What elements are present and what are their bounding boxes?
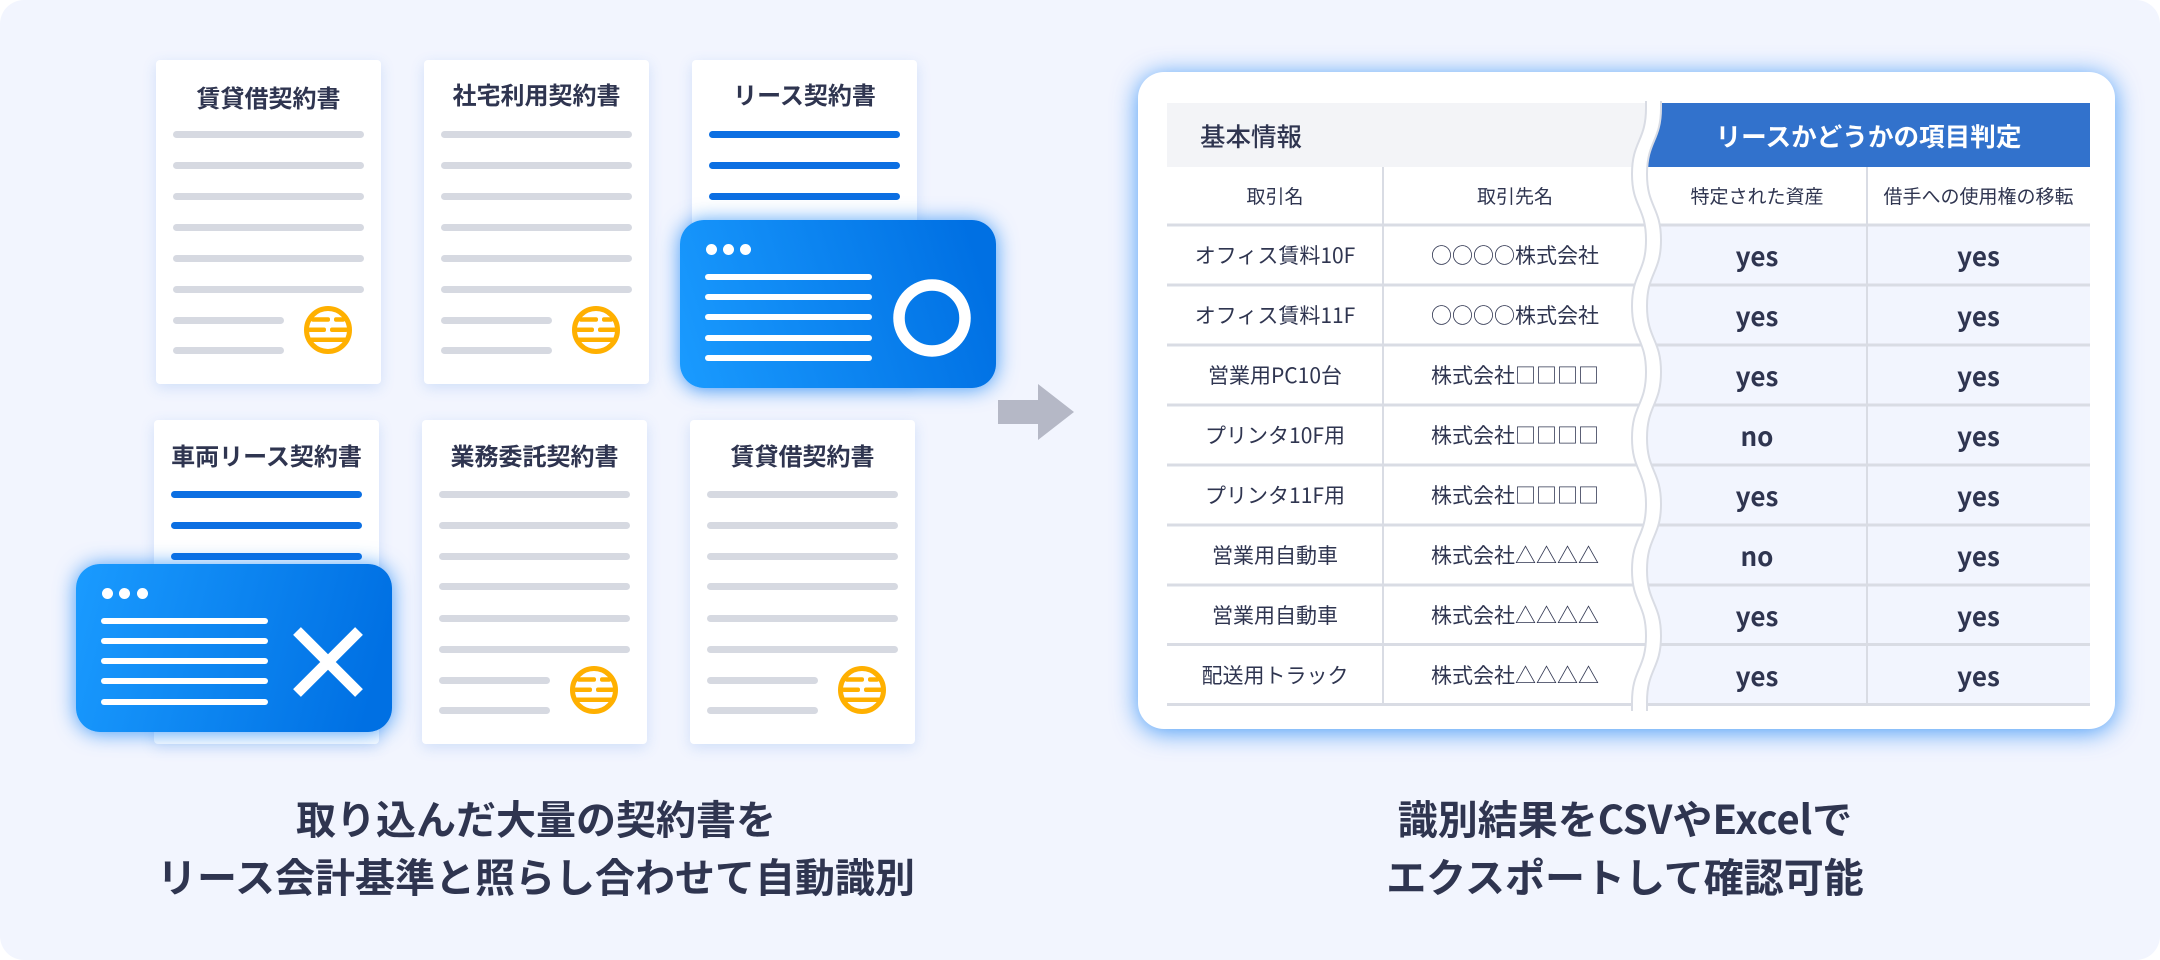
table row 6 [1212, 537, 2000, 574]
column header: 特定された資産: 特定された資産 [1690, 182, 1824, 209]
table row 5: 株式会社□□□□ [1431, 480, 1599, 510]
caption: left: リース会計基準と照らし合わせて自動識別 [157, 846, 915, 904]
document: 業務委託契約書 [422, 420, 647, 744]
table row 1 [1195, 237, 2000, 274]
document title: 車両リース契約書 [171, 437, 362, 472]
document: 賃貸借契約書 (bottom right) [690, 420, 915, 744]
document title: 賃貸借契約書 [730, 437, 874, 472]
table row 4: 株式会社□□□□ [1431, 420, 1599, 450]
table row 7: yes [1957, 597, 2000, 634]
caption: right: エクスポートして確認可能 [1386, 846, 1864, 904]
panel: result table card [1138, 72, 2115, 729]
document: 社宅利用契約書 [424, 60, 649, 384]
table row 3: 営業用PC10台 [1208, 360, 1342, 390]
table row 6: no [1741, 537, 1773, 574]
icon: cross mark [293, 627, 363, 697]
table row 8: yes [1736, 657, 1778, 694]
table row 6: 株式会社△△△△ [1431, 540, 1599, 570]
table row 7: 営業用自動車 [1212, 600, 1338, 630]
table row 3 [1208, 357, 2000, 394]
document: 車両リース契約書 [154, 420, 379, 744]
table row 8: 配送用トラック [1202, 660, 1348, 690]
column header: 取引先名: 取引先名 [1477, 182, 1553, 209]
table row 7: 株式会社△△△△ [1431, 600, 1599, 630]
table row 7 [1212, 597, 2000, 634]
table row 5 [1205, 477, 2000, 514]
table row 4: プリンタ10F用 [1205, 420, 1345, 450]
table row 2: ○○○○株式会社 [1431, 300, 1599, 330]
table row 5: yes [1957, 477, 2000, 514]
table row 1: ○○○○株式会社 [1431, 240, 1599, 270]
table row 8: yes [1957, 657, 2000, 694]
caption: left [157, 788, 915, 904]
table row 1: yes [1957, 237, 2000, 274]
table row 6: yes [1957, 537, 2000, 574]
table row 2: yes [1736, 297, 1778, 334]
caption: right [1386, 788, 1864, 904]
icon: seal stamp [304, 306, 352, 354]
caption: left: 取り込んだ大量の契約書を [296, 788, 776, 846]
document title: リース契約書 [733, 76, 876, 111]
table row 1: オフィス賃料10F [1195, 240, 1355, 270]
icon: seal stamp [570, 666, 618, 714]
table row 2: yes [1957, 297, 2000, 334]
table row 3: yes [1736, 357, 1778, 394]
table row 2 [1195, 297, 2000, 334]
arrow [998, 384, 1074, 440]
document title: 業務委託契約書 [450, 437, 618, 472]
document title: 賃貸借契約書 [196, 78, 340, 114]
document: 賃貸借契約書 (top left) [156, 60, 381, 384]
document: リース契約書 [692, 60, 917, 384]
table row 4 [1205, 417, 2000, 454]
table row 4: yes [1957, 417, 2000, 454]
document title: 社宅利用契約書 [452, 76, 620, 111]
caption: right: 識別結果をCSVやExcelで [1398, 788, 1852, 846]
table row 7: yes [1736, 597, 1778, 634]
table row 8 [1202, 657, 2000, 694]
table row 3: yes [1957, 357, 2000, 394]
blue card: circle result [680, 220, 996, 388]
table row 2: オフィス賃料11F [1195, 300, 1355, 330]
icon: circle mark [893, 279, 971, 357]
table row 8: 株式会社△△△△ [1431, 660, 1599, 690]
column header: 取引名: 取引名 [1246, 182, 1304, 209]
heading: リースかどうかの項目判定: リースかどうかの項目判定 [1716, 117, 2021, 154]
table row 4: no [1741, 417, 1773, 454]
column header: 借手への使用権の移転: 借手への使用権の移転 [1883, 182, 2074, 209]
icon: seal stamp [572, 306, 620, 354]
table row 5: yes [1736, 477, 1778, 514]
heading: 基本情報: 基本情報 [1200, 117, 1302, 154]
table backgrounds, gridlines and wavy break [1167, 101, 2090, 711]
table row 5: プリンタ11F用 [1205, 480, 1345, 510]
table [1167, 101, 2090, 711]
table row 6: 営業用自動車 [1212, 540, 1338, 570]
table row 3: 株式会社□□□□ [1431, 360, 1599, 390]
icon: seal stamp [838, 666, 886, 714]
table row 1: yes [1736, 237, 1778, 274]
blue card: cross result [76, 564, 392, 732]
